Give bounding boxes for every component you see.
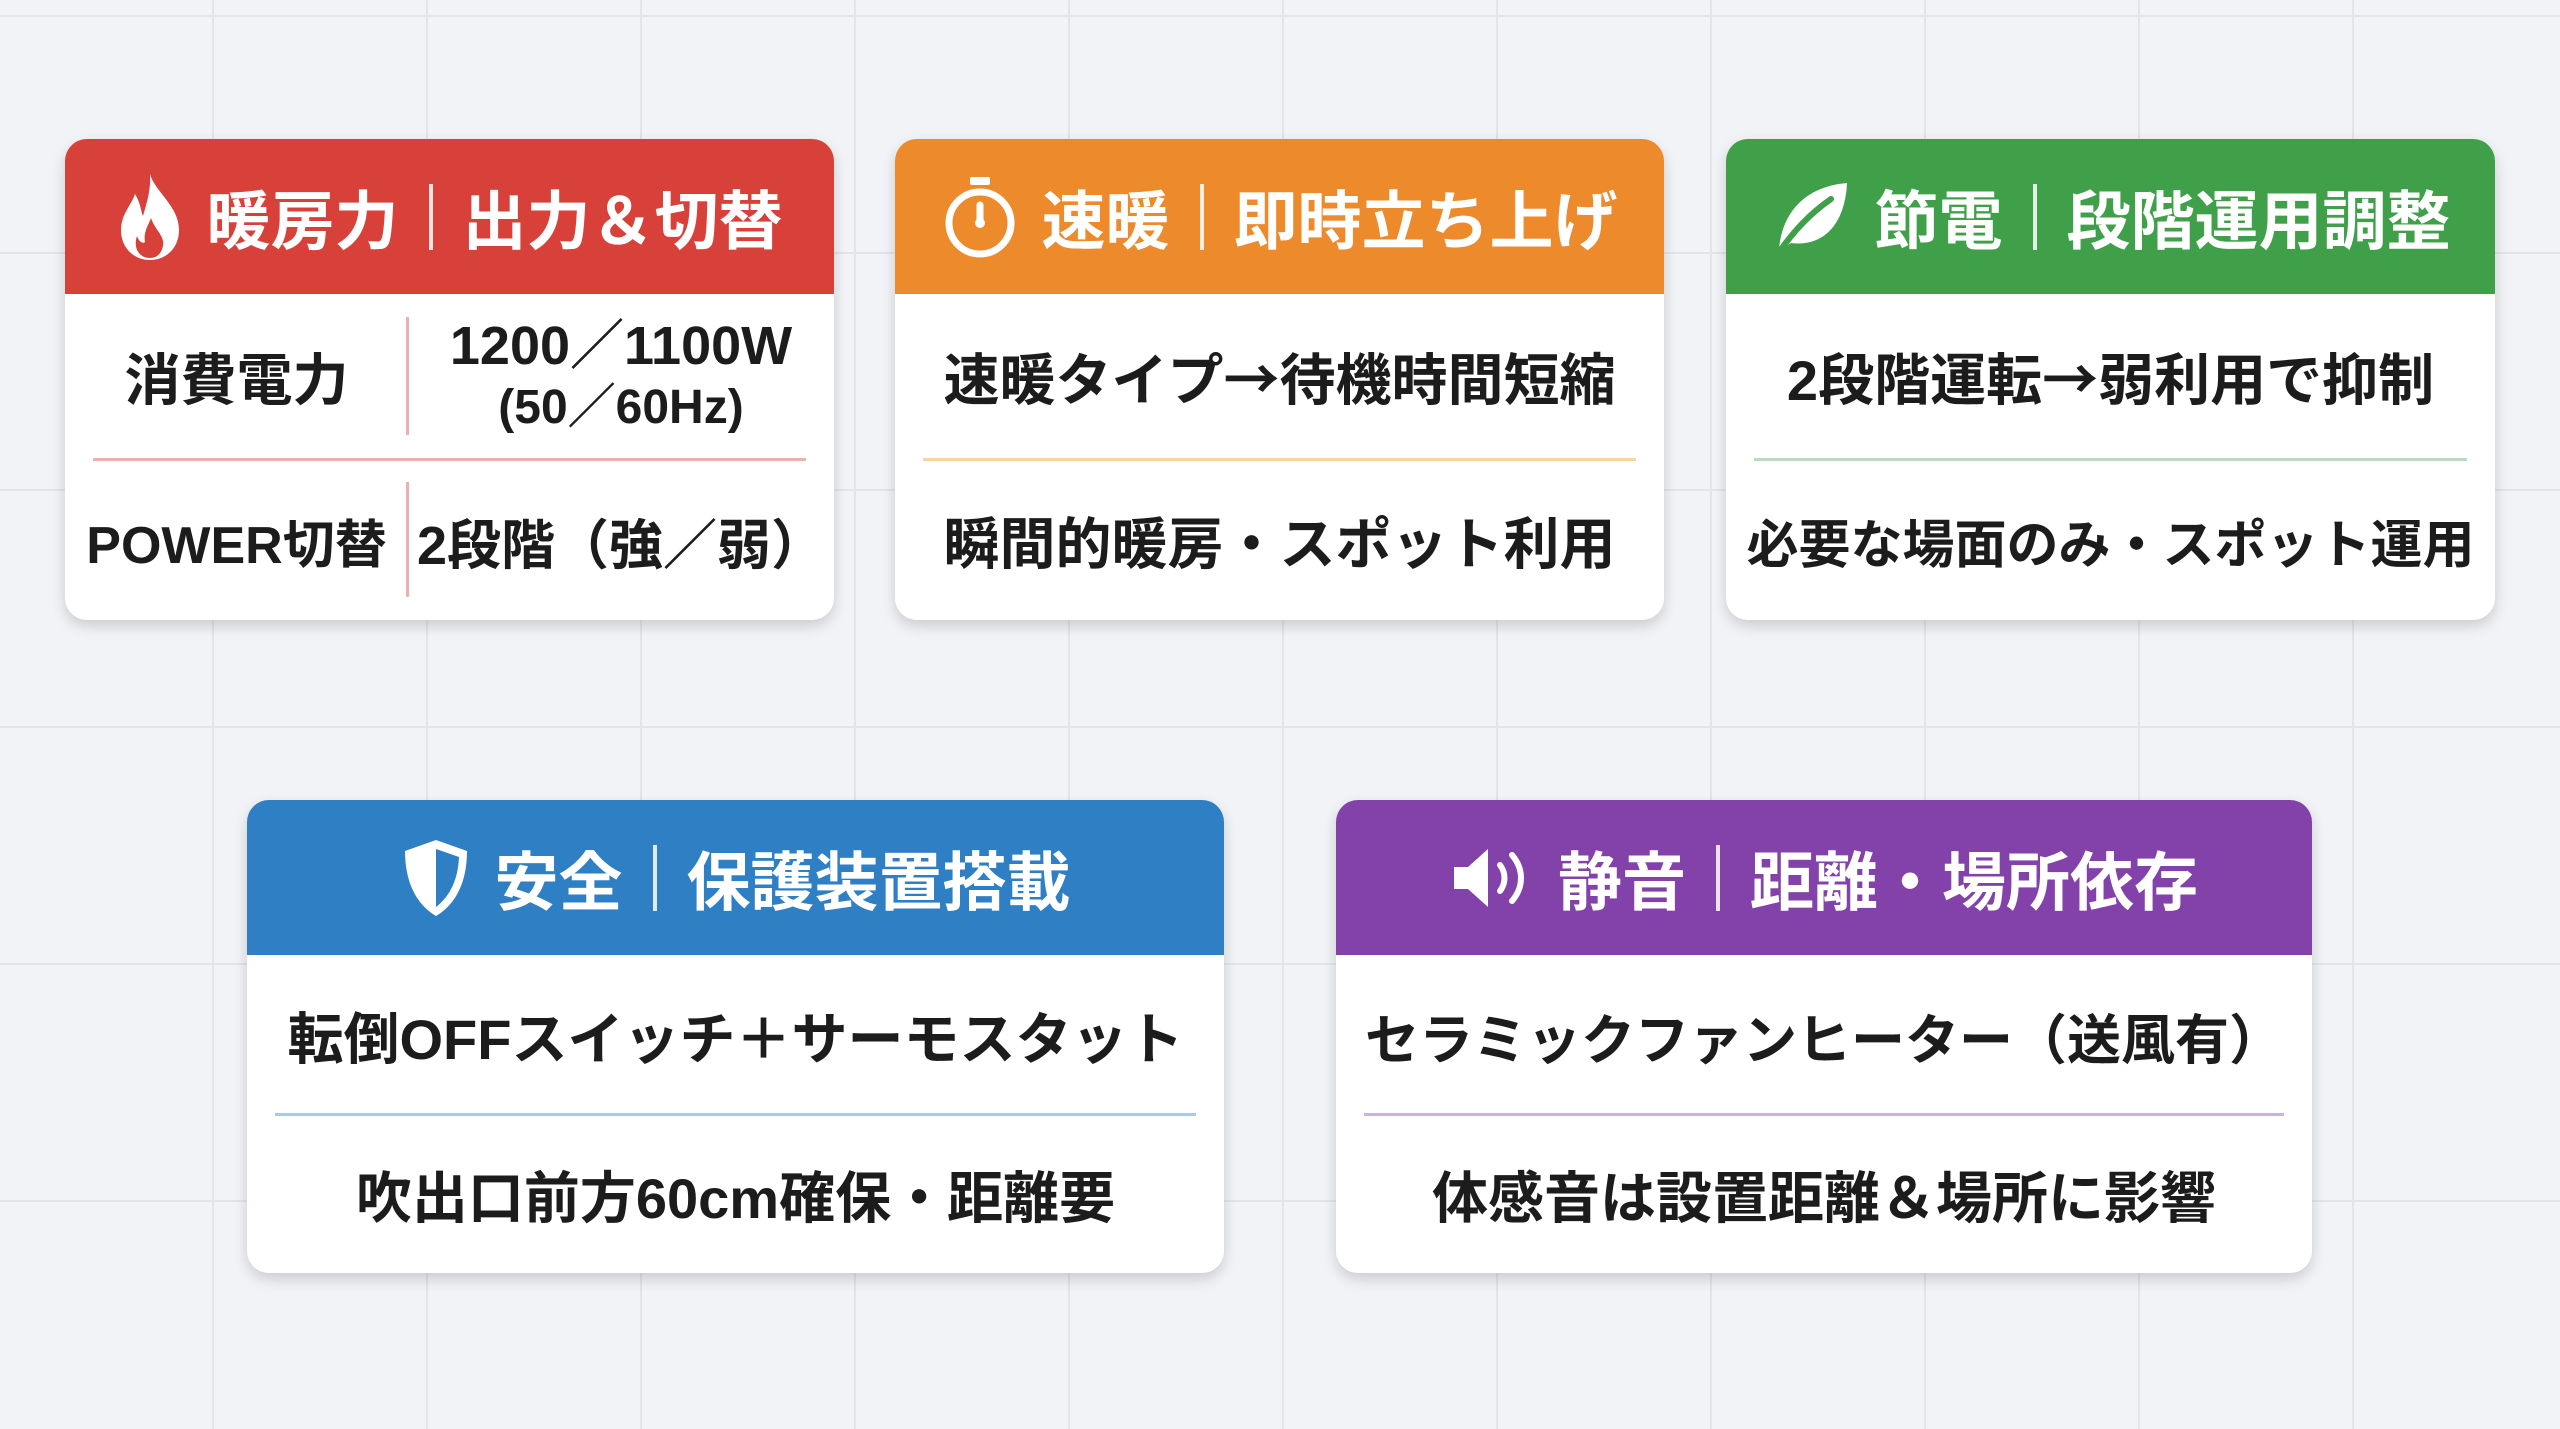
icon: leaf bbox=[1779, 183, 1847, 247]
panel: heating power bbox=[65, 139, 834, 620]
row: spot use: 瞬間的暖房・スポット利用 bbox=[944, 513, 1616, 576]
header: safety: 安全 bbox=[494, 846, 622, 918]
header: quietness bbox=[1336, 800, 2312, 955]
header: energy saving: 節電 bbox=[1874, 186, 2002, 258]
header: energy saving: 段階運用調整 bbox=[2066, 186, 2450, 258]
header: heating power: 出力＆切替 bbox=[462, 186, 782, 258]
row: power switch bbox=[86, 516, 825, 576]
row: power consumption: 消費電力 bbox=[124, 349, 348, 412]
row: power switch: 2段階（強／弱） bbox=[417, 516, 825, 576]
header: safety bbox=[247, 800, 1224, 955]
header: quick heating: 速暖 bbox=[1042, 186, 1170, 258]
panel: energy saving bbox=[1726, 139, 2495, 620]
row: tip-over switch: 転倒OFFスイッチ＋サーモスタット bbox=[288, 1008, 1183, 1070]
header: quick heating bbox=[895, 139, 1664, 294]
panel: safety bbox=[247, 800, 1224, 1273]
row: quick type: → bbox=[1224, 336, 1280, 417]
panel: quick heating bbox=[895, 139, 1664, 620]
row: two-stage: 2段階運転 弱利用で抑制 bbox=[1787, 349, 2434, 412]
row: power consumption: (50／60Hz) bbox=[498, 380, 744, 434]
row: power consumption: 1200／1100W bbox=[450, 316, 792, 376]
icon: shield bbox=[405, 840, 467, 916]
header: safety: 保護装置搭載 bbox=[686, 846, 1070, 918]
header: quietness: 距離・場所依存 bbox=[1750, 846, 2198, 918]
icon: stopwatch bbox=[946, 177, 1014, 258]
row: ceramic fan heater: セラミックファンヒーター（送風有） bbox=[1365, 1010, 2283, 1070]
header: heating power bbox=[65, 139, 834, 294]
icon: flame bbox=[121, 174, 179, 260]
header: quick heating: 即時立ち上げ bbox=[1234, 186, 1618, 258]
panel: quietness bbox=[1336, 800, 2312, 1273]
header: heating power: 暖房力 bbox=[206, 186, 398, 258]
header: quietness: 静音 bbox=[1558, 846, 1686, 918]
header: energy saving bbox=[1726, 139, 2495, 294]
row: power switch: POWER切替 bbox=[86, 517, 387, 575]
icon: speaker bbox=[1454, 849, 1524, 907]
row: needed only: 必要な場面のみ・スポット運用 bbox=[1746, 517, 2474, 575]
row: power consumption bbox=[124, 316, 792, 434]
row: two-stage: → bbox=[2042, 336, 2098, 417]
row: perceived noise: 体感音は設置距離＆場所に影響 bbox=[1432, 1167, 2216, 1230]
row: quick type: 速暖タイプ 待機時間短縮 bbox=[944, 349, 1616, 412]
row: 60cm clearance: 吹出口前方60cm確保・距離要 bbox=[356, 1167, 1115, 1230]
